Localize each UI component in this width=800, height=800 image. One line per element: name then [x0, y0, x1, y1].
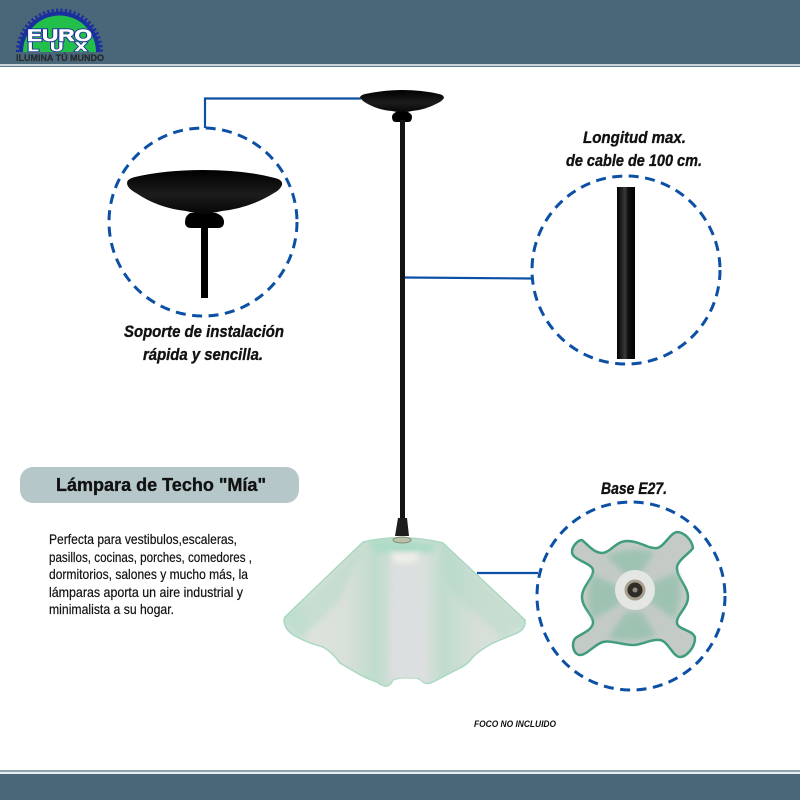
caption: cable length — [566, 128, 702, 170]
header bar — [0, 0, 800, 67]
socket — [395, 518, 409, 536]
logo: Eurolux: EURO — [27, 26, 92, 45]
description: Perfecta para vestibulos,escaleras, — [49, 531, 237, 547]
logo: Eurolux: ILUMINA TÚ MUNDO — [16, 52, 104, 64]
pendant lamp — [284, 90, 525, 686]
glass shade seen from below — [572, 532, 695, 657]
caption: mount — [124, 322, 284, 364]
caption: base: Base E27. — [601, 479, 667, 498]
title pill: Lámpara de Techo "Mía" — [56, 474, 266, 495]
detail circle: ceiling mount — [109, 128, 297, 316]
caption: cable length: de cable de 100 cm. — [566, 151, 702, 170]
glass shade — [284, 537, 525, 686]
cable — [400, 120, 405, 520]
footer bar — [0, 770, 800, 800]
logo: Eurolux: LUX — [28, 41, 88, 54]
detail circle: E27 base — [537, 502, 725, 690]
description: minimalista a su hogar. — [49, 601, 174, 617]
collar — [392, 112, 412, 122]
caption: mount: rápida y sencilla. — [143, 345, 263, 364]
connector: canopy to detail circle — [205, 98, 361, 128]
caption: mount: Soporte de instalación — [124, 322, 284, 341]
logo: Eurolux: LUX — [28, 41, 88, 54]
title pill — [20, 467, 299, 503]
description: dormitorios, salones y mucho más, la — [49, 566, 248, 582]
description: lámparas aporta un aire industrial y — [49, 584, 243, 600]
logo: Eurolux: EURO — [27, 26, 92, 45]
connector: cable to detail circle — [405, 278, 532, 279]
lamp holder ring — [393, 537, 411, 543]
description: pasillos, cocinas, porches, comedores , — [49, 549, 252, 565]
caption: cable length: Longitud max. — [583, 128, 686, 147]
canopy — [360, 90, 444, 113]
detail circle: cable — [532, 176, 720, 364]
note: bulb not included: FOCO NO INCLUIDO — [474, 719, 557, 730]
connector: shade to detail circle — [477, 572, 538, 574]
description — [49, 531, 252, 617]
logo: Eurolux — [16, 10, 104, 64]
